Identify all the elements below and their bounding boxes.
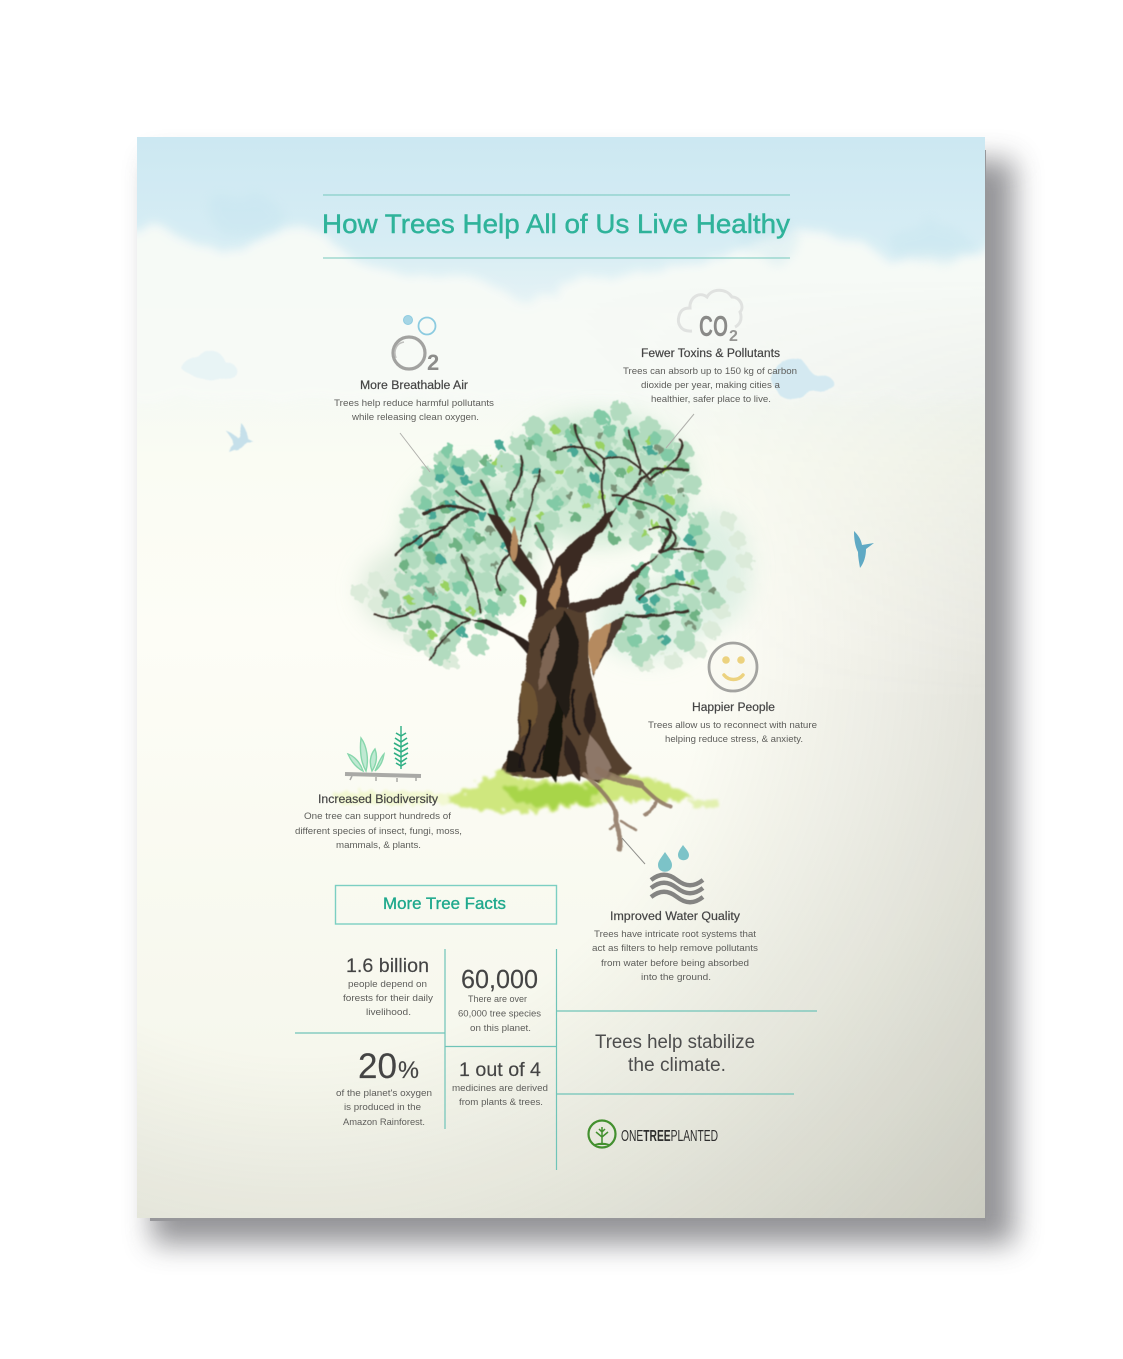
callout line: water <box>622 838 645 864</box>
fact: 1 out of 4: from plants & trees. <box>459 1097 543 1108</box>
pale blue cloud, right <box>771 359 834 399</box>
description: dioxide per year, making cities a <box>641 380 781 391</box>
fact: 1.6 billion: 1.6 billion <box>346 956 429 977</box>
description: Trees allow us to reconnect with nature <box>648 720 817 731</box>
description <box>592 929 758 983</box>
fact: 60,000: 60,000 tree species <box>458 1008 541 1020</box>
fact: 1.6 billion: livelihood. <box>366 1007 411 1018</box>
description <box>295 811 462 851</box>
icon: oxygen bubbles: 2 <box>427 350 439 375</box>
clouds <box>137 220 985 338</box>
description <box>648 720 817 745</box>
heading: More Breathable Air <box>360 380 468 392</box>
block: biodiversity <box>295 726 462 851</box>
fact: 20%: 20 <box>358 1047 397 1086</box>
description: mammals, & plants. <box>336 840 421 851</box>
fact: 20%: of the planet's oxygen <box>336 1088 432 1099</box>
description: while releasing clean oxygen. <box>351 412 479 423</box>
fact: 60,000: on this planet. <box>470 1023 531 1034</box>
callout line: toxins <box>666 414 694 448</box>
description: Trees help reduce harmful pollutants <box>334 398 494 409</box>
poster background <box>125 137 1000 1218</box>
icon: CO2 cloud <box>678 290 742 345</box>
heading: Fewer Toxins & Pollutants <box>641 348 780 360</box>
heading: Increased Biodiversity <box>318 794 438 806</box>
blue cloud patches <box>744 229 967 265</box>
block: water quality <box>592 845 758 983</box>
logo: one tree planted: ONETREEPLANTED <box>621 1128 718 1145</box>
logo: one tree planted <box>588 1120 718 1148</box>
description: Trees can absorb up to 150 kg of carbon <box>623 366 797 377</box>
description: into the ground. <box>641 972 711 983</box>
icon: water drops and waves <box>651 845 703 902</box>
tree <box>335 412 750 849</box>
description: helping reduce stress, & anxiety. <box>665 734 803 745</box>
description: One tree can support hundreds of <box>304 811 451 822</box>
fact: 1 out of 4: 1 out of 4 <box>459 1060 541 1081</box>
bird left <box>226 423 253 452</box>
title: How Trees Help All of Us Live Healthy <box>322 209 790 239</box>
block: fewer toxins <box>623 290 797 405</box>
fact: 1 out of 4: medicines are derived <box>452 1083 548 1094</box>
title rule top <box>323 194 790 196</box>
icon: plants on log <box>345 726 421 782</box>
fact: 1.6 billion <box>343 956 433 1018</box>
description: Trees have intricate root systems that <box>594 929 756 940</box>
block: happier people <box>648 643 817 745</box>
icon: CO2 cloud: CO <box>699 311 728 343</box>
pale blue cloud, left <box>181 351 237 379</box>
branches <box>375 425 703 660</box>
trunk and limbs <box>470 507 660 786</box>
fact: 20% <box>336 1047 432 1128</box>
roots <box>585 770 670 849</box>
title rule bottom <box>323 257 790 259</box>
icon: CO2 cloud: 2 <box>729 328 738 345</box>
fact: 20%: is produced in the <box>344 1102 421 1113</box>
fact: 1 out of 4 <box>452 1060 548 1108</box>
fact: 60,000 <box>458 964 541 1034</box>
icon: smiley <box>709 643 757 691</box>
panel: more tree facts heading <box>336 886 556 924</box>
block: more breathable air <box>334 316 494 423</box>
fact: 1.6 billion: forests for their daily <box>343 993 433 1004</box>
fact: 60,000: There are over <box>468 994 527 1005</box>
panel: more tree facts heading: More Tree Facts <box>383 894 506 913</box>
fact: climate statement: the climate. <box>628 1055 726 1076</box>
fact: 60,000: 60,000 <box>461 964 538 994</box>
description <box>623 366 797 405</box>
icon: oxygen bubbles <box>393 316 439 375</box>
leaves <box>360 412 745 664</box>
fact: 20%: % <box>398 1057 419 1084</box>
heading: Happier People <box>692 702 775 714</box>
poster edge <box>150 150 986 1221</box>
bird right <box>854 531 874 568</box>
fact: 1.6 billion: people depend on <box>348 979 427 990</box>
poster shadow <box>152 160 1014 1244</box>
description: act as filters to help remove pollutants <box>592 943 758 954</box>
description: healthier, safer place to live. <box>651 394 771 405</box>
description: from water before being absorbed <box>601 958 749 969</box>
infographic poster <box>134 137 1032 1263</box>
fact: 20%: Amazon Rainforest. <box>343 1117 425 1128</box>
fact: climate statement: Trees help stabilize <box>595 1032 755 1053</box>
fact: climate statement <box>595 1032 755 1076</box>
heading: Improved Water Quality <box>610 911 740 923</box>
description <box>334 398 494 423</box>
canopy pale wash <box>360 415 750 660</box>
fact grid lines <box>295 949 817 1170</box>
grass <box>335 772 720 812</box>
description: different species of insect, fungi, moss, <box>295 826 462 837</box>
callout line: air <box>400 433 430 472</box>
